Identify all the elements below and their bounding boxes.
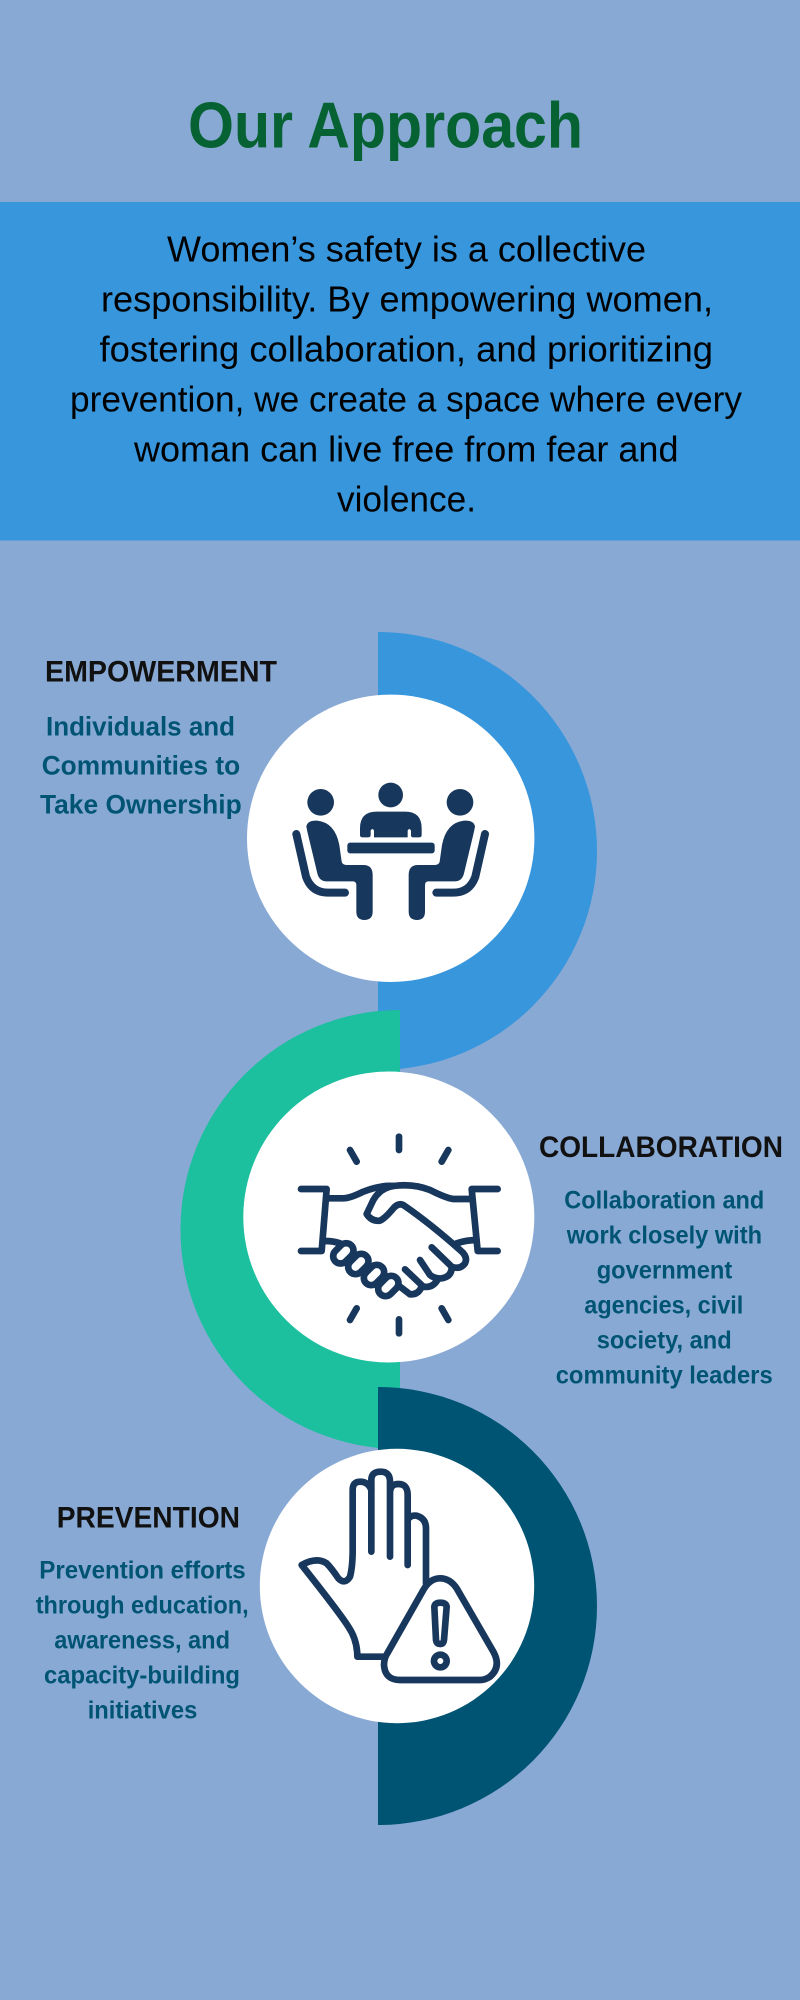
text: empowerment description: Take Ownership <box>40 789 242 819</box>
text: empowerment description: Communities to <box>42 750 240 780</box>
white circle <box>247 695 534 982</box>
icon: raised hand with warning triangle <box>302 1472 497 1680</box>
heading: prevention: PREVENTION <box>57 1502 240 1535</box>
text: collaboration description <box>556 1186 773 1390</box>
text: prevention description <box>36 1556 249 1724</box>
intro text: fostering collaboration, and prioritizing <box>100 329 713 370</box>
panel: empowerment <box>40 632 597 1070</box>
intro text: prevention, we create a space where every <box>70 379 743 420</box>
intro text: woman can live free from fear and <box>133 429 678 470</box>
text: collaboration description: agencies, civil <box>584 1292 743 1320</box>
icon: handshake <box>301 1137 498 1333</box>
text: prevention description: Prevention efforts <box>39 1556 246 1584</box>
heading: collaboration: COLLABORATION <box>539 1131 783 1164</box>
text: collaboration description: government <box>597 1256 733 1284</box>
text: collaboration description: community leaders <box>556 1362 773 1390</box>
intro text: responsibility. By empowering women, <box>101 279 713 320</box>
text: collaboration description: work closely with <box>566 1222 762 1250</box>
text: prevention description: capacity-building <box>44 1661 240 1689</box>
white circle <box>260 1449 534 1723</box>
intro text <box>70 229 743 520</box>
text: prevention description: through education, <box>36 1591 249 1619</box>
panel: collaboration <box>181 1010 783 1449</box>
text: prevention description: initiatives <box>88 1696 197 1724</box>
text: empowerment description: Individuals and <box>46 712 235 742</box>
panel: prevention <box>36 1387 597 1825</box>
title: Our Approach <box>188 88 583 162</box>
intro text: violence. <box>337 479 476 520</box>
white circle <box>243 1072 534 1362</box>
panel: intro band <box>0 202 800 540</box>
text: prevention description: awareness, and <box>54 1626 230 1654</box>
text: collaboration description: Collaboration and <box>564 1186 764 1214</box>
dark teal half circle <box>378 1387 597 1825</box>
intro text: Women’s safety is a collective <box>167 229 646 270</box>
icon: people meeting at a table <box>296 783 485 920</box>
heading: empowerment: EMPOWERMENT <box>45 656 277 689</box>
green half circle <box>181 1010 400 1449</box>
text: collaboration description: society, and <box>597 1326 732 1354</box>
text: empowerment description <box>40 712 242 819</box>
blue half circle <box>378 632 597 1070</box>
